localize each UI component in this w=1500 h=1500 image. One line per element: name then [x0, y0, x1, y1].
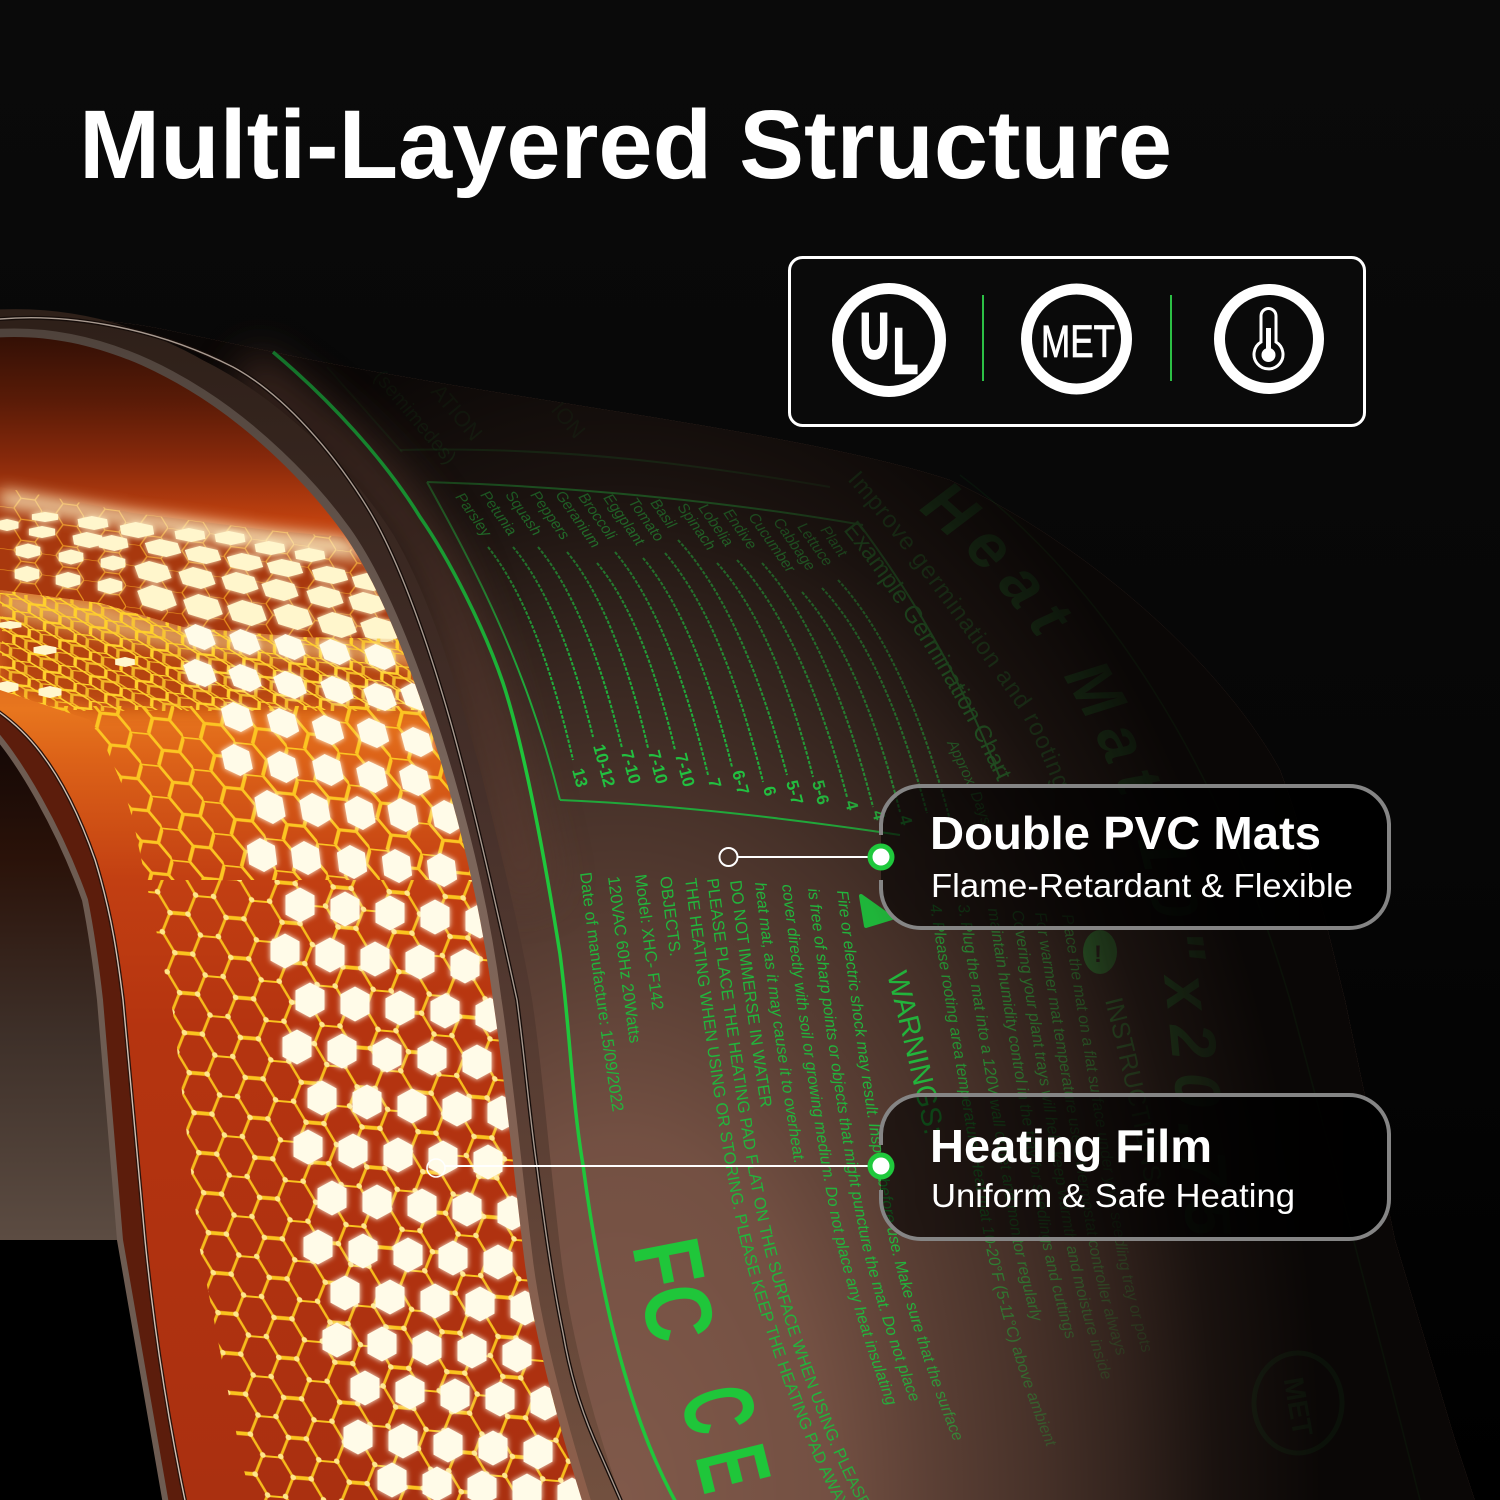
chart plant names: Spinach	[674, 500, 719, 554]
faint MET mark on mat	[1254, 1353, 1342, 1453]
icon: info badge: !	[1094, 941, 1102, 968]
instruction text lines: maintain humidity control in the tray for seedlings and cuttings	[988, 909, 1074, 1338]
chart day values	[568, 742, 916, 828]
warning text lines: heat mat, as it may cause it to overheat.	[755, 883, 804, 1162]
callout heading: Double PVC Mats	[930, 807, 1321, 859]
chart headings: Improve germination and rooting	[848, 470, 1066, 789]
chart day values: 7-10	[671, 751, 698, 789]
chart day values: 5-6	[808, 778, 833, 807]
title: Multi-Layered Structure	[79, 90, 1172, 199]
germination chart frame	[358, 403, 1001, 836]
chart plant names: Geranium	[552, 488, 603, 551]
chart plant names: Basil	[647, 496, 680, 532]
chart plant names: Tomato	[625, 495, 667, 545]
instruction text lines: Place the mat on a flat surface under your seedling tray or pots	[1062, 916, 1150, 1352]
warning text lines: cover directly with soil or growing medium. Do not place any heat insulating	[782, 885, 896, 1404]
chart headings: ATION	[426, 379, 487, 445]
chart plant names: Petunia	[477, 488, 520, 539]
callout dot	[868, 844, 894, 870]
certification badges panel	[790, 258, 1364, 426]
chart day values: 5-7	[782, 778, 807, 807]
icon: UL badge: L	[893, 315, 918, 387]
chart day values: 4	[895, 813, 916, 828]
chart plant names: Plant	[817, 523, 851, 561]
chart day values: 4	[841, 798, 862, 813]
back heating band	[0, 487, 420, 650]
instruction text lines: Covering your plant trays will help keep warmth and moisture inside	[1012, 911, 1111, 1379]
icon: thermometer badge	[1220, 290, 1318, 388]
chart day values: 6	[759, 784, 780, 798]
chart day values: 7-10	[617, 748, 644, 786]
instruction text lines: 3. Plug the mat into a 120V wall outlet and monitor regularly	[958, 905, 1042, 1320]
mat rim	[0, 318, 625, 1500]
icon: MET badge	[1026, 289, 1126, 389]
faint MET mark on mat: MET	[1278, 1375, 1319, 1438]
outer mat surface	[0, 319, 1478, 1500]
chart plant names: Lobelia	[695, 501, 736, 550]
icon: UL badge	[838, 288, 940, 392]
product specification lines: 120VAC 60Hz 20Watts	[608, 877, 639, 1043]
product specification lines: OBJECTS.	[660, 876, 680, 956]
honeycomb conductive mesh	[0, 590, 582, 1500]
FCC mark: FC	[611, 1230, 735, 1350]
mat outer thin border	[960, 475, 1420, 1500]
glowing hex cells	[181, 624, 586, 1500]
chart day values: 7-10	[644, 748, 671, 786]
instruction text lines: INSTRUCTIONS:	[1106, 998, 1144, 1116]
warning text lines: WARNINGS:	[888, 969, 942, 1134]
leader line	[720, 848, 870, 866]
printed mat text and chart	[358, 384, 1420, 1500]
chart plant names: Squash	[502, 488, 545, 539]
instruction text lines: For warmer mat temperature use a thermostat controller always	[1035, 914, 1124, 1355]
icon: MET badge: MET	[1041, 316, 1115, 367]
divider	[1170, 295, 1172, 381]
warning text lines: THE HEATING WHEN USING OR STORING. PLEASE KEEP THE HEATING PAD AWAY	[686, 878, 846, 1500]
chart plant names: Broccoli	[575, 490, 620, 544]
product specification lines: Model: XHC- F142	[635, 874, 664, 1010]
warning text lines	[686, 878, 961, 1500]
chart plant names: Parsley	[452, 490, 495, 541]
callout heading: Heating Film	[930, 1120, 1212, 1172]
chart plant names: Lettuce	[794, 520, 836, 570]
instruction text lines	[930, 904, 1150, 1446]
chart headings: Example Germination Chart	[844, 522, 1011, 782]
chart plant names: Cucumber	[745, 510, 799, 577]
product specification lines	[580, 872, 680, 1112]
chart headings	[382, 384, 1066, 824]
icon: warning triangle	[861, 896, 892, 926]
icon: info badge	[1083, 930, 1117, 974]
callout dot	[868, 1152, 894, 1180]
chart plant names: Peppers	[527, 488, 573, 543]
chart plant names: Eggplant	[600, 491, 648, 549]
lower arch and inner rim	[0, 706, 187, 1500]
warning text lines: DO NOT IMMERSE IN WATER	[730, 880, 772, 1108]
warning text lines: is free of sharp points or objects that might puncture the mat. Do not place	[808, 889, 918, 1401]
chart headings: (semimedes)	[369, 366, 460, 469]
instruction text lines: 4. Please rooting area temperature. Heat mat 10-20°F (5-11°C) above ambient	[930, 904, 1056, 1446]
chart plant names	[452, 488, 851, 577]
chart day values: 4	[868, 808, 889, 823]
arch interior	[0, 337, 406, 660]
chart day values: 13	[568, 766, 591, 789]
chart leader lines	[488, 540, 950, 820]
callout text: Flame-Retardant & Flexible	[931, 868, 1353, 905]
front heating band	[0, 590, 620, 1500]
leader line	[427, 1159, 870, 1177]
chart day values: 6-7	[728, 768, 753, 797]
chart day values: 7	[704, 776, 725, 790]
divider	[982, 295, 984, 381]
green border line	[273, 352, 680, 1500]
warning text lines: Fire or electric shock may result. Inspect before use. Make sure that the surface	[837, 891, 961, 1440]
product specification lines: Date of manufacture: 15/09/2022	[580, 872, 624, 1112]
chart day values: 10-12	[589, 742, 619, 789]
chart plant names: Endive	[720, 506, 760, 553]
icon: UL badge: U	[860, 300, 889, 372]
callout: heating film	[427, 1094, 1389, 1240]
callout text: Uniform & Safe Heating	[931, 1178, 1295, 1215]
glowing heating film	[0, 337, 582, 1500]
chart headings: Approx. Days	[946, 742, 989, 824]
chart plant names: Cabbage	[770, 515, 819, 574]
warning text lines: PLEASE PLACE THE HEATING PAD FLAT ON THE SURFACE WHEN USING. PLEASE	[707, 878, 870, 1500]
under-arch dark void	[0, 1240, 162, 1500]
callout: double PVC mats	[720, 784, 1389, 929]
chart headings: ION	[546, 397, 590, 443]
